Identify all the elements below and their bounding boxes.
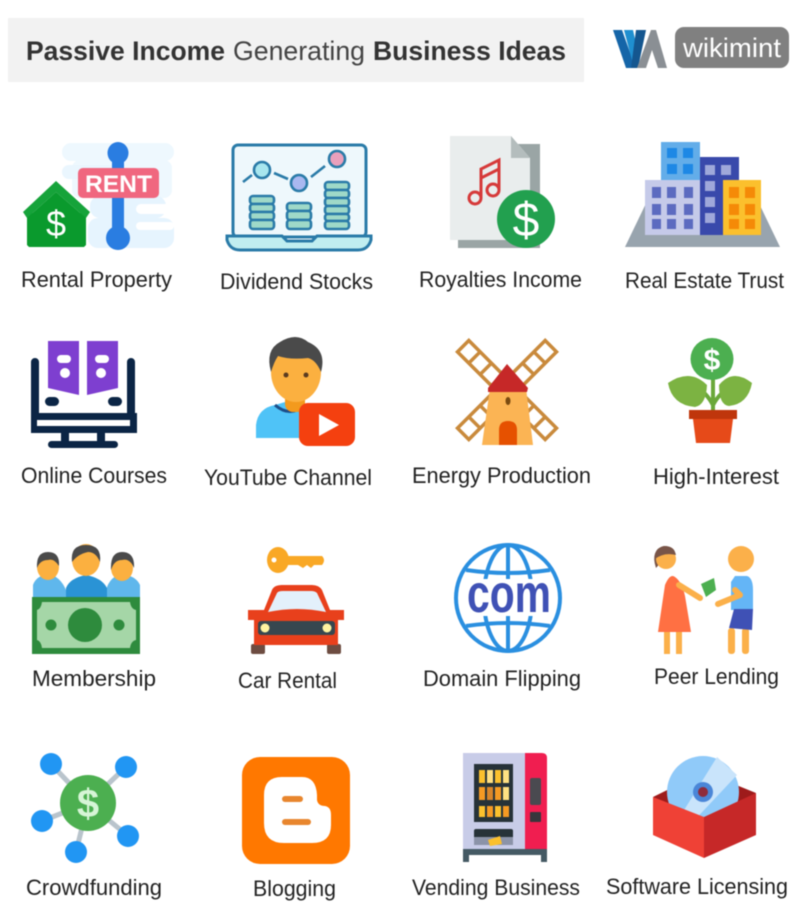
card: Membership — [32, 544, 156, 691]
label: YouTube Channel — [204, 465, 372, 490]
icon: car and key — [248, 547, 344, 654]
icon: rent sign and house — [23, 142, 174, 250]
icon: vending machine — [463, 753, 547, 862]
icon: laptop with coin stacks — [227, 145, 371, 250]
label: Energy Production — [412, 463, 591, 488]
card: Blogging — [242, 757, 350, 901]
icon: globe with com — [456, 545, 560, 651]
label: Real Estate Trust — [625, 268, 784, 293]
card: Real Estate Trust — [625, 142, 784, 293]
title banner: Passive Income — [26, 36, 225, 66]
label: Blogging — [253, 876, 336, 901]
title banner: Business Ideas — [373, 36, 566, 66]
icon: music file with dollar coin — [450, 136, 555, 248]
label: Domain Flipping — [423, 666, 581, 691]
label: Membership — [32, 666, 156, 691]
card: Software Licensing — [606, 756, 788, 899]
icon: people above banknote — [32, 544, 140, 654]
icon: monitor with open book — [31, 341, 137, 448]
icon: globe with com: com — [467, 564, 551, 624]
icon: disc in red box — [653, 756, 756, 858]
icon: money plant — [668, 338, 752, 443]
icon: money plant: $ — [704, 344, 721, 377]
card: Dividend Stocks — [220, 145, 373, 294]
label: Royalties Income — [419, 267, 582, 292]
icon: blogger logo — [242, 757, 350, 864]
label: Peer Lending — [654, 664, 779, 689]
icon: two people exchanging money — [654, 546, 754, 654]
icon: network around dollar coin — [31, 753, 139, 863]
logo: wikimint: wikimint — [682, 33, 781, 63]
label: Dividend Stocks — [220, 269, 373, 294]
card: Vending Business — [412, 753, 580, 900]
card: Rental Property — [21, 142, 174, 292]
label: Rental Property — [21, 267, 172, 292]
card: Crowdfunding — [26, 753, 162, 900]
card: Car Rental — [238, 547, 344, 693]
icon: windmill — [458, 341, 556, 445]
label: Online Courses — [21, 463, 167, 488]
card: Royalties Income — [419, 136, 582, 292]
card: Energy Production — [412, 341, 591, 488]
label: Software Licensing — [606, 874, 788, 899]
label: Crowdfunding — [26, 875, 162, 900]
card: Peer Lending — [654, 546, 779, 689]
card: Online Courses — [21, 341, 167, 488]
label: High-Interest — [653, 464, 779, 489]
card: YouTube Channel — [204, 337, 372, 490]
title banner: Generating — [233, 36, 365, 66]
icon: network around dollar coin: $ — [77, 782, 99, 826]
icon: rent sign and house: $ — [46, 203, 66, 244]
icon: rent sign and house: RENT — [85, 171, 152, 198]
icon: music file with dollar coin: $ — [513, 194, 539, 247]
label: Car Rental — [238, 668, 337, 693]
title banner — [8, 18, 584, 82]
card: High-Interest — [653, 338, 779, 489]
label: Vending Business — [412, 875, 580, 900]
logo: wikimint — [613, 27, 789, 68]
icon: person with play button — [256, 337, 355, 446]
icon: city buildings — [625, 142, 780, 247]
card: Domain Flipping — [423, 545, 581, 691]
